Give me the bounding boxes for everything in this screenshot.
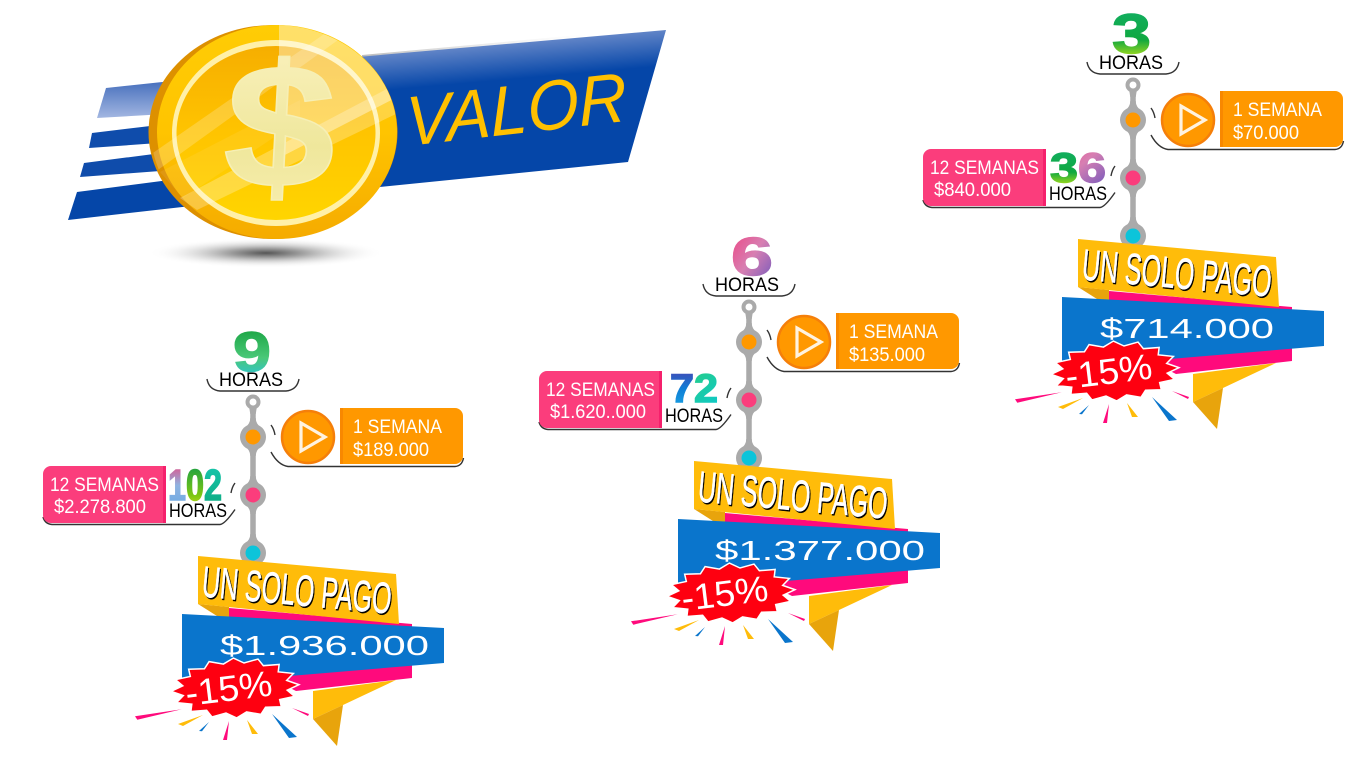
pink card: 12 semanas: 72: [670, 367, 718, 411]
ribbon: un solo pago: UN SOLO PAGO: [200, 558, 394, 624]
ribbon: un solo pago: [1015, 239, 1324, 429]
blue banner stripe 1: [97, 78, 200, 118]
label HORAS: HORAS: [715, 274, 779, 296]
orange card: 1 semana: [1151, 91, 1344, 150]
pink card: 12 semanas: 12 SEMANAS: [930, 158, 1039, 179]
timeline: [240, 396, 266, 566]
orange card: 1 semana: 1 SEMANA: [1233, 100, 1322, 121]
pink card: 12 semanas: $1.620..000: [550, 402, 646, 423]
blue banner stripe 3: [80, 148, 200, 177]
pink card: 12 semanas: 12 SEMANAS: [50, 475, 159, 496]
pink card: 12 semanas: 12 SEMANAS: [546, 380, 655, 401]
dollar sign: $: [219, 29, 341, 225]
ribbon: un solo pago: [631, 461, 940, 651]
orange card: 1 semana: $189.000: [353, 440, 429, 461]
pink card: 12 semanas: $2.278.800: [54, 497, 146, 518]
pink card: 12 semanas: HORAS: [1049, 183, 1107, 205]
discount badge: [666, 560, 796, 626]
ribbon: un solo pago: -15%: [1063, 346, 1154, 397]
blue banner main: [300, 30, 666, 195]
title VALOR: VALOR: [404, 58, 628, 161]
label HORAS: HORAS: [219, 369, 283, 391]
label HORAS: HORAS: [1099, 52, 1163, 74]
orange card: 1 semana: [767, 313, 960, 372]
orange card: 1 semana: 1 SEMANA: [353, 417, 442, 438]
pink card: 12 semanas: HORAS: [665, 405, 723, 427]
ribbon: un solo pago: UN SOLO PAGO: [201, 559, 395, 625]
pink card: 12 semanas: [923, 144, 1115, 208]
orange card: 1 semana: $70.000: [1233, 123, 1299, 144]
package: 9 horas: [43, 320, 464, 746]
price: $714.000: [1100, 313, 1274, 344]
ribbon: un solo pago: UN SOLO PAGO: [697, 464, 891, 530]
blue banner stripe 2: [89, 120, 200, 148]
gray banner highlight: [362, 34, 590, 60]
hour count 3: 3: [1112, 2, 1151, 65]
package: 3 horas: [923, 2, 1344, 429]
package: 6 horas: [539, 227, 960, 651]
gold coin: [148, 20, 405, 239]
pink card: 12 semanas: 102: [168, 461, 222, 510]
pink card: 12 semanas: [539, 367, 731, 430]
bracket under HORAS: [1087, 62, 1179, 74]
pink card: 12 semanas: 36: [1050, 144, 1106, 191]
ribbon: un solo pago: [135, 556, 444, 746]
bracket under HORAS: [703, 284, 795, 296]
ribbon: un solo pago: -15%: [679, 568, 770, 619]
pink card: 12 semanas: HORAS: [169, 500, 227, 522]
price: $1.936.000: [220, 630, 429, 661]
ribbon: un solo pago: -15%: [183, 663, 274, 714]
discount badge: [1050, 338, 1180, 404]
orange card: 1 semana: [271, 408, 464, 466]
timeline: [736, 302, 762, 471]
discount badge: [170, 655, 300, 721]
ribbon: un solo pago: UN SOLO PAGO: [696, 463, 890, 529]
hour count 9: 9: [233, 320, 271, 383]
burst rays: [631, 613, 805, 645]
hour count 6: 6: [731, 227, 773, 287]
coin shadow: [148, 238, 384, 268]
coin logo banner with title VALOR: [68, 20, 666, 268]
orange card: 1 semana: 1 SEMANA: [849, 322, 938, 343]
price: $1.377.000: [715, 535, 925, 566]
blue banner stripe 4: [68, 176, 200, 220]
pink card: 12 semanas: $840.000: [934, 180, 1011, 201]
burst rays: [1015, 391, 1189, 423]
burst rays: [135, 708, 309, 740]
pink card: 12 semanas: [43, 461, 235, 524]
bracket under HORAS: [207, 379, 299, 391]
orange card: 1 semana: $135.000: [849, 345, 925, 366]
timeline: [1120, 80, 1146, 249]
